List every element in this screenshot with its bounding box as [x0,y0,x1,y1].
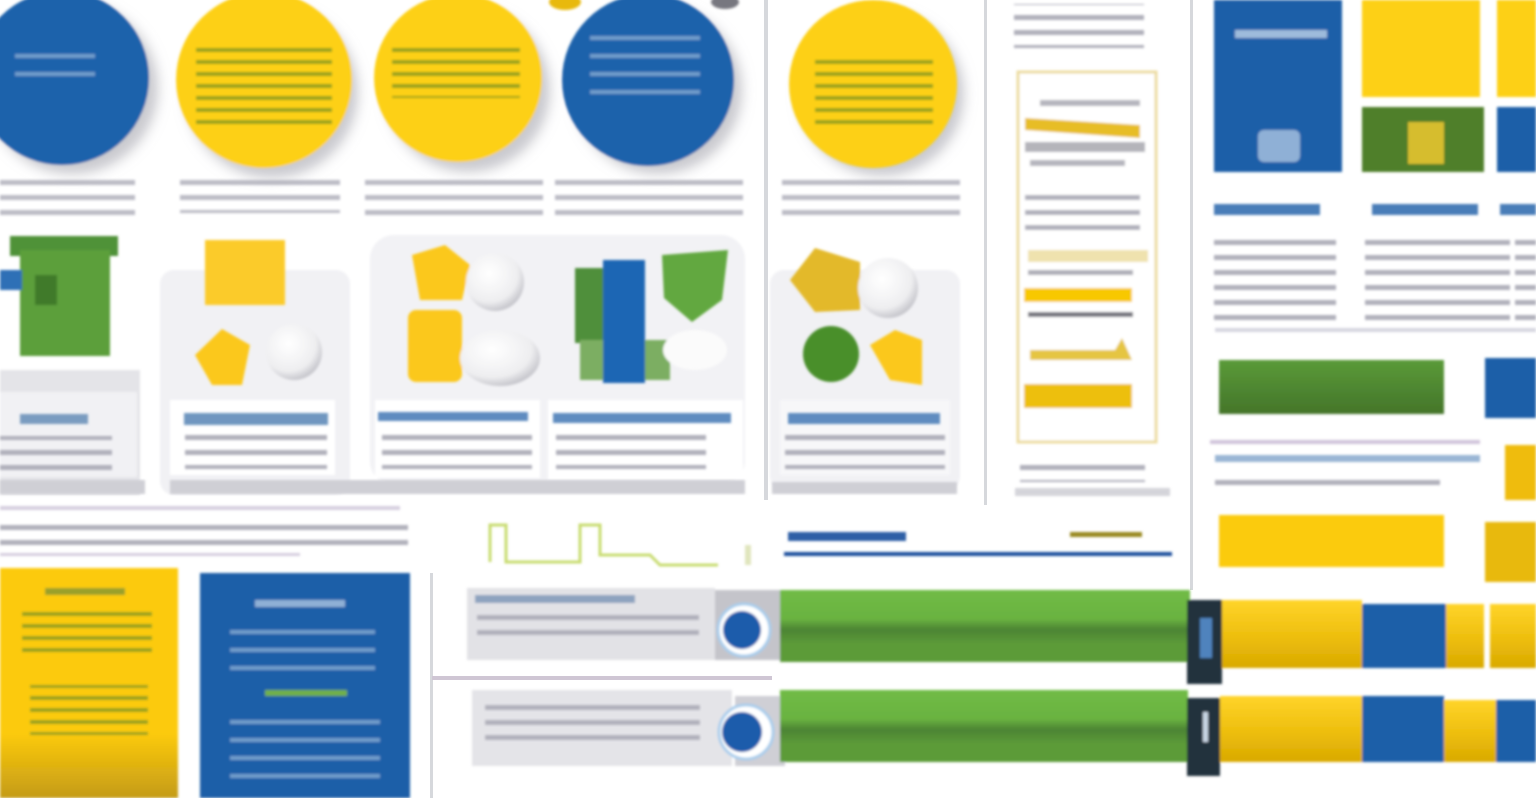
block: yellow right [1497,0,1536,97]
panel: card backgrounds [0,235,960,495]
panel: yellow bottom left [0,568,178,798]
circle text: blue one [15,42,95,82]
circle: yellow three [374,0,542,162]
icon: shapes card five [790,248,922,385]
label panel [472,690,732,766]
blue segment [1362,604,1446,668]
yellow segment [1444,700,1496,762]
circle shadows [0,2,964,178]
bar: yellow right lower [1485,522,1536,582]
yellow segments [1446,604,1484,668]
icon: yellow square on green [1408,122,1444,164]
dark clasp [1187,600,1222,684]
heading: mid right [784,532,1172,556]
bar: yellow [1219,515,1444,567]
text rows below circles [0,178,960,220]
panel: top text [1014,4,1144,48]
label panel [467,588,715,660]
icon: blue pillar with green leaves [575,250,728,383]
small green line chart [490,525,748,565]
icon: pill [1258,130,1300,162]
bar: green [1219,360,1444,414]
right column bars [1210,358,1536,582]
card bottom shadows [0,480,957,494]
yellow bar [1222,600,1362,668]
icon: yellow shapes card two [195,240,322,385]
panel: top right color blocks [1214,0,1536,172]
small yellow top dots [549,0,739,10]
band: mid left text [0,506,408,556]
icon: green pillar [0,236,118,356]
node circle [718,604,770,656]
card headings and text [0,412,945,471]
circle: yellow five [789,0,957,168]
row two [472,690,1536,776]
blue segment [1362,696,1444,762]
block: yellow [1362,0,1480,97]
block: green [1362,107,1484,172]
circle: blue one [0,0,149,165]
node circle [719,705,773,759]
green bar [780,690,1188,762]
bar: blue right [1485,358,1536,418]
panel: blue bottom [200,573,410,798]
blue right segment [1496,700,1536,762]
panel: bar chart [1015,72,1170,496]
bar: yellow right upper [1505,445,1536,500]
dark clasp [1187,698,1220,776]
right column headings [1214,204,1536,332]
panel: top left circles [0,0,964,178]
yellow bar [1220,696,1362,762]
block text [1235,30,1327,38]
divider row [432,676,772,680]
row one [467,588,1536,684]
connector [715,590,785,660]
block: blue right [1497,107,1536,172]
green bar [780,590,1190,662]
circle: yellow two [176,0,352,168]
icon: yellow shapes card three [408,245,540,386]
circle: blue four [562,0,734,166]
block: blue [1214,0,1342,172]
vertical dividers [430,0,1193,798]
connector [735,696,785,766]
circle text: yellow three [392,48,520,98]
circle text: blue four [590,30,700,102]
circle text: yellow two [196,42,332,130]
